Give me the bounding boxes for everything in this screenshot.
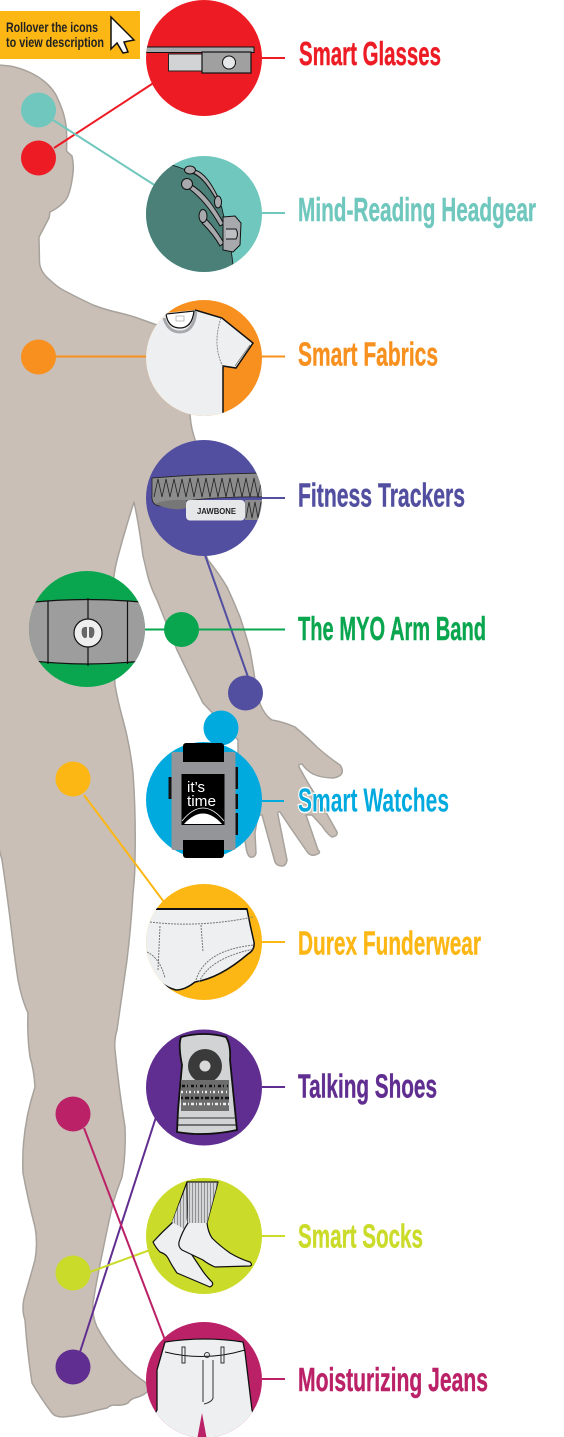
labels: Smart Socks: [298, 1218, 423, 1254]
connector lines: [53, 58, 285, 1379]
icon: fitness tracker band: [146, 440, 265, 556]
labels: [298, 35, 536, 1398]
icon: smart glasses: [146, 0, 262, 116]
icon: MYO arm band: [25, 571, 150, 687]
icon: smart socks: [146, 1178, 262, 1294]
labels: Fitness Trackers: [298, 476, 465, 514]
icon: smart watch: it’s: [187, 779, 205, 796]
icon: fitness tracker band: JAWBONE: [197, 506, 236, 516]
human body silhouette: [0, 65, 342, 1417]
icon: smart watch: time: [187, 793, 216, 810]
icon: talking shoes: [146, 1030, 262, 1146]
icon: smart watch: [146, 742, 262, 858]
icon: smart fabrics t-shirt: [140, 300, 262, 420]
icon: funderwear briefs: [140, 884, 262, 1000]
labels: Smart Fabrics: [298, 336, 438, 372]
labels: Smart Watches: [298, 782, 449, 818]
rollover instruction box: [0, 11, 140, 59]
icon: mind-reading headgear: [140, 156, 262, 275]
body marker dots: [21, 92, 263, 1384]
labels: Talking Shoes: [298, 1068, 437, 1104]
labels: Smart Glasses: [299, 35, 441, 72]
rollover instruction box: to view description: [6, 34, 104, 50]
icon: moisturizing jeans: [140, 1322, 262, 1437]
rollover instruction box: Rollover the icons: [6, 19, 98, 35]
